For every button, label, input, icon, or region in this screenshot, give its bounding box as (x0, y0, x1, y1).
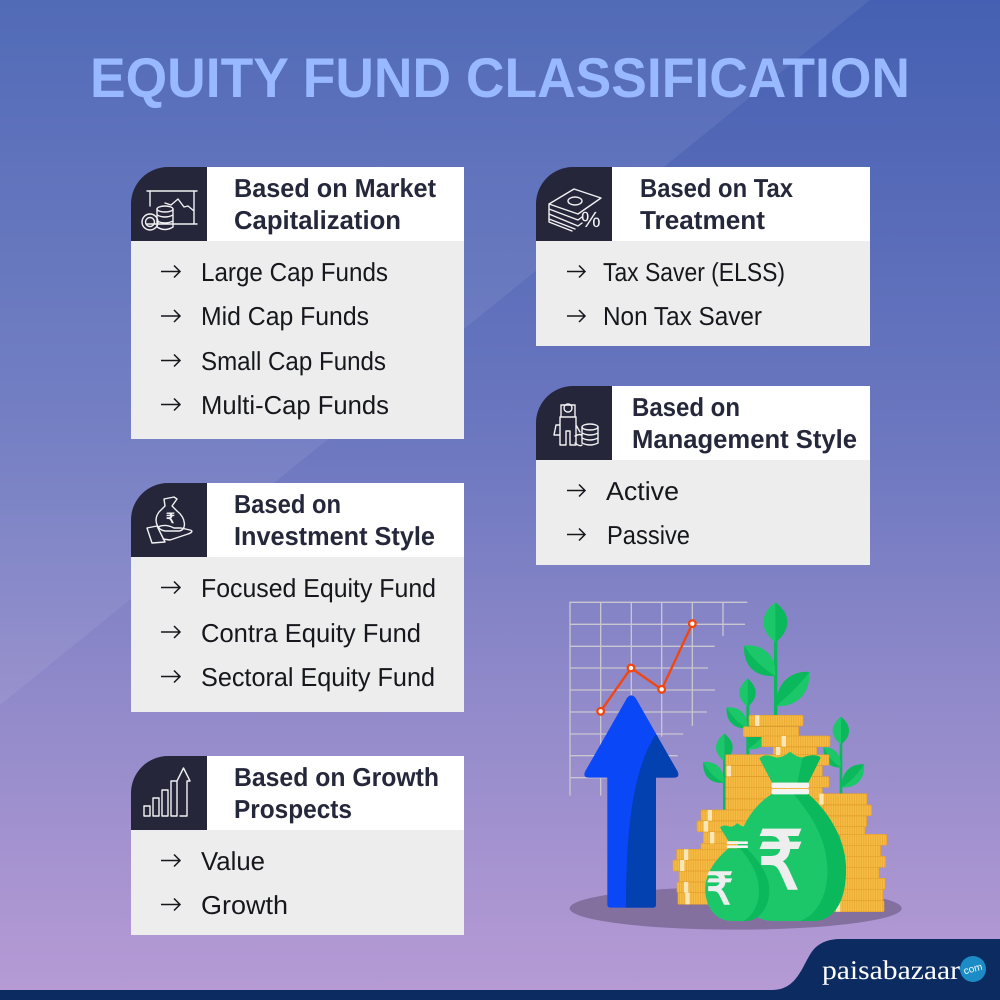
chart grid (569, 602, 747, 796)
heading: investment style: Based on (234, 489, 341, 519)
heading: management style: Based on (632, 392, 740, 422)
heading: tax treatment (640, 173, 793, 235)
panel: market capitalization (131, 167, 464, 439)
icon: banknotes and percent (549, 189, 601, 231)
icon: hand holding money bag (147, 497, 192, 543)
list: market capitalization funds (161, 257, 389, 420)
small money bag (705, 823, 769, 921)
logo: paisabazaar: paisabazaar (822, 955, 960, 985)
illustration: growth chart, arrow, coins and money bags (569, 602, 902, 930)
list: tax treatment (567, 257, 785, 331)
list: market capitalization funds: Large Cap Funds (201, 257, 388, 287)
large rupee symbol: ₹ (758, 816, 803, 906)
list: market capitalization funds: Small Cap Funds (201, 346, 386, 376)
heading: growth prospects: Based on Growth (234, 762, 439, 792)
plants (703, 602, 864, 813)
heading: market capitalization: Based on Market (234, 173, 436, 203)
list: market capitalization funds: Multi-Cap Funds (201, 390, 389, 420)
ground shadow (570, 887, 902, 930)
heading: management style (632, 392, 857, 454)
panel: management style (536, 386, 870, 565)
list: management style: Active (606, 476, 679, 506)
blue up arrow (584, 695, 678, 908)
list: management style (567, 476, 690, 550)
icon: seated manager with coins (554, 404, 598, 446)
list: tax treatment: Tax Saver (ELSS) (603, 257, 785, 287)
list: growth prospects: Value (201, 846, 265, 876)
heading: tax treatment: Treatment (640, 205, 765, 235)
list: management style: Passive (607, 520, 690, 550)
panel: tax treatment (536, 167, 870, 346)
list: investment style funds: Sectoral Equity Fund (201, 662, 435, 692)
large money bag (736, 752, 846, 921)
small rupee symbol: ₹ (706, 864, 733, 913)
list: investment style funds: Contra Equity Fund (201, 618, 421, 648)
list: market capitalization funds: Mid Cap Funds (201, 301, 369, 331)
icon: rising bars (144, 768, 190, 816)
chart line (597, 620, 696, 715)
heading: tax treatment: Based on Tax (640, 173, 793, 203)
heading: investment style: Investment Style (234, 521, 435, 551)
icon: presentation board with coins (142, 191, 197, 230)
list: investment style funds (161, 573, 436, 692)
heading: management style: Management Style (632, 424, 857, 454)
heading: growth prospects (234, 762, 439, 824)
list: growth prospects (161, 846, 288, 920)
heading: growth prospects: Prospects (234, 794, 352, 824)
icon glyph: rupee: ₹ (166, 510, 175, 526)
heading: investment style (234, 489, 435, 551)
icon glyph: percent: % (581, 207, 601, 232)
logo badge: com (960, 956, 986, 982)
footer bar with logo tab (0, 939, 1000, 1000)
panel: growth prospects (131, 756, 464, 935)
list: growth prospects: Growth (201, 890, 288, 920)
title: EQUITY FUND CLASSIFICATION (90, 46, 910, 109)
logo badge: com: com (963, 962, 984, 977)
coin stacks (673, 715, 887, 912)
list: investment style funds: Focused Equity Fund (201, 573, 436, 603)
heading: market capitalization (234, 173, 436, 235)
heading: market capitalization: Capitalization (234, 205, 401, 235)
list: tax treatment: Non Tax Saver (603, 301, 762, 331)
panel: investment style (131, 483, 464, 712)
